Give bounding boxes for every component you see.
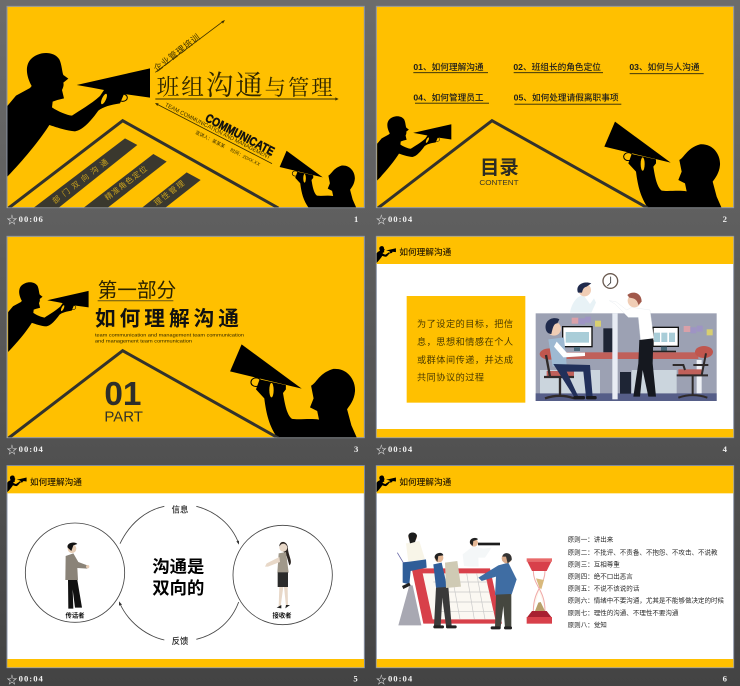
footer: slide 2 timing: ☆ xyxy=(376,215,387,227)
footer: slide 6 timing xyxy=(376,674,728,686)
list of eight principles: 原则七：理性的沟通、不理性不要沟通 xyxy=(568,608,679,617)
item 04: 04、如何管理员工 xyxy=(413,91,484,102)
central statement xyxy=(152,556,204,598)
silhouette: small man with megaphone xyxy=(280,151,357,210)
number 01: 01 xyxy=(104,376,141,413)
footer band xyxy=(377,429,733,437)
label PART: PART xyxy=(104,409,143,426)
list of eight principles: 原则五：不说不该说的话 xyxy=(568,583,640,592)
slide 6: principles xyxy=(376,466,734,686)
header band xyxy=(377,466,733,493)
icon: header silhouette xyxy=(377,475,396,492)
footer band xyxy=(7,659,364,667)
arrow: under title xyxy=(155,97,339,101)
footer: slide 5 timing: 00:04 xyxy=(19,674,44,684)
band: 部门双向沟通 xyxy=(33,138,137,208)
figure: receiver xyxy=(265,542,291,608)
list of eight principles: 原则四：绝不口出恶言 xyxy=(568,572,633,581)
item 01: 01、如何理解沟通 xyxy=(413,61,484,72)
circle: receiver xyxy=(233,525,332,625)
footer: slide 5 timing xyxy=(7,674,359,686)
slide 5: two-way communication xyxy=(7,466,364,686)
header title: 如何理解沟通 xyxy=(399,246,452,257)
silhouette: large man with megaphone xyxy=(604,122,724,213)
sub-heading: CONTENT: CONTENT xyxy=(479,178,519,187)
slide 2: contents xyxy=(376,6,734,227)
title: 与管理 xyxy=(265,76,335,100)
header title: 如何理解沟通 xyxy=(30,476,82,487)
definition box: 息，思想和情感在个人 xyxy=(417,336,514,347)
icon: header silhouette xyxy=(7,475,27,492)
illustration: hourglass xyxy=(527,558,552,624)
presenter info: 宣讲人：某某某 时间：20XX.XX xyxy=(194,129,262,168)
silhouette: small man with megaphone xyxy=(8,282,89,352)
list of eight principles: 原则二：不批评、不责备、不抱怨、不攻击、不说教 xyxy=(568,547,718,556)
slide 1: cover xyxy=(7,6,364,227)
footer: slide 6 timing: 00:04 xyxy=(388,674,413,684)
English description xyxy=(95,332,245,344)
footer: slide 2 timing: 00:04 xyxy=(388,214,413,224)
definition box: 为了设定的目标，把信 xyxy=(417,318,514,329)
definition box: 或群体间传递，并达成 xyxy=(417,354,514,365)
footer: slide 3 timing: ☆ xyxy=(7,445,18,457)
COMMUNICATE heading: COMMUNICATE xyxy=(203,112,276,159)
footer: slide 1 timing: ☆ xyxy=(7,215,18,227)
illustration: office cubicle xyxy=(536,274,717,401)
figure: speaker xyxy=(65,543,89,609)
band: 精准角色定位: 精准角色定位 xyxy=(102,163,150,202)
list of eight principles xyxy=(568,535,725,629)
silhouette: shouting man with megaphone xyxy=(7,53,150,177)
arc arrow: message xyxy=(120,506,239,545)
illustration: team with calendar xyxy=(397,532,517,629)
section title: 如何理解沟通 xyxy=(95,307,243,330)
item 02: 02、班组长的角色定位 xyxy=(513,61,601,72)
arrow: upper diagonal with subtitle: 企业管理培训 xyxy=(151,31,202,74)
silhouette: small man with megaphone xyxy=(377,116,451,181)
list of eight principles: 原则一：讲出来 xyxy=(568,535,614,544)
English description: team communication and management team communication xyxy=(95,332,245,337)
footer band xyxy=(377,659,733,667)
footer: slide 3 timing: 3 xyxy=(354,444,359,454)
list of eight principles: 原则三：互相尊重 xyxy=(568,560,620,569)
footer: slide 1 timing: 1 xyxy=(354,214,359,224)
item 03: 03、如何与人沟通 xyxy=(629,61,700,72)
header band xyxy=(377,237,733,264)
label: 反馈: 反馈 xyxy=(172,636,189,646)
arc arrow: feedback xyxy=(119,601,239,640)
arrow: upper diagonal with subtitle xyxy=(151,20,225,74)
icon: header silhouette xyxy=(377,246,396,263)
footer: slide 1 timing xyxy=(7,214,359,227)
section label with underline: 第一部分 xyxy=(98,280,176,302)
list of eight principles: 原则八：觉知 xyxy=(568,620,607,629)
title: 班组 xyxy=(157,75,206,100)
circle: receiver: 接收者 xyxy=(273,611,292,620)
footer: slide 2 timing: 2 xyxy=(723,214,728,224)
band: 精准角色定位 xyxy=(83,154,167,208)
roof outline xyxy=(9,351,278,438)
circle: speaker xyxy=(25,523,125,622)
English subtitle: TEAM COMMUNICATION AND MANAGEMENT xyxy=(164,102,271,161)
circle: speaker: 传话者 xyxy=(66,611,85,620)
central statement: 沟通是 xyxy=(152,556,204,576)
heading: 目录: 目录 xyxy=(480,157,519,179)
band: 理性管理: 理性管理 xyxy=(152,177,187,208)
English description: and management team communication xyxy=(95,339,193,344)
roof outline xyxy=(9,121,278,208)
slide 3: part one xyxy=(7,236,364,457)
footer: slide 2 timing xyxy=(376,214,728,227)
footer: slide 4 timing: ☆ xyxy=(376,445,387,457)
definition box xyxy=(407,296,525,403)
footer: slide 4 timing: 4 xyxy=(723,444,728,454)
footer: slide 3 timing xyxy=(7,444,359,457)
footer: slide 5 timing: 5 xyxy=(353,674,359,684)
header band xyxy=(7,466,364,493)
definition box: 共同协议的过程 xyxy=(417,371,485,382)
silhouette: large man with megaphone xyxy=(230,344,359,443)
band: 部门双向沟通: 部门双向沟通 xyxy=(50,154,113,206)
item 05: 05、如何处理请假离职事项 xyxy=(514,91,619,102)
band: 理性管理 xyxy=(142,172,201,208)
footer: slide 5 timing: ☆ xyxy=(7,674,18,686)
roof outline xyxy=(378,121,648,208)
footer: slide 1 timing: 00:06 xyxy=(19,214,44,224)
slide 4: definition xyxy=(376,236,734,457)
footer: slide 3 timing: 00:04 xyxy=(19,444,44,454)
arrow: lower diagonal xyxy=(155,103,272,164)
footer: slide 4 timing xyxy=(376,444,728,457)
list of eight principles: 原则六：情绪中不要沟通，尤其是不能够做决定的时候 xyxy=(568,595,725,604)
footer: slide 4 timing: 00:04 xyxy=(388,444,413,454)
footer: slide 6 timing: ☆ xyxy=(376,674,387,686)
title: 沟通 xyxy=(206,70,265,100)
footer: slide 6 timing: 6 xyxy=(723,674,728,684)
label: 信息: 信息 xyxy=(172,504,188,514)
central statement: 双向的 xyxy=(152,578,204,598)
header title: 如何理解沟通 xyxy=(399,476,452,487)
